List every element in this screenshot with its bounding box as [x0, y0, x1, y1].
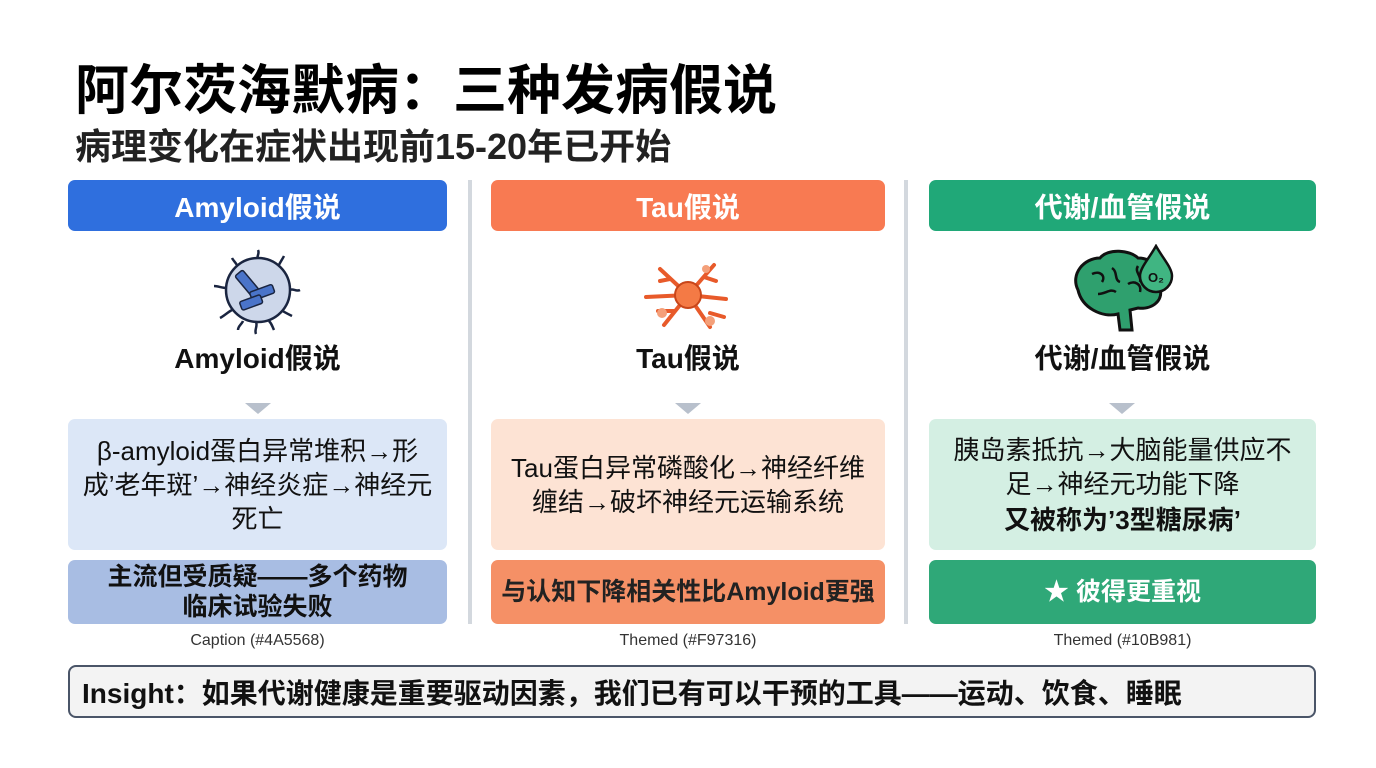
- icon: brain with O2: [1074, 244, 1174, 332]
- callout: metabolic: [929, 560, 1316, 624]
- arrow: tau: [675, 403, 701, 414]
- callout: amyloid: 主流但受质疑——多个药物临床试验失败: [107, 563, 408, 621]
- insight box: Insight：如果代谢健康是重要驱动因素，我们已有可以干预的工具——运动、饮食、睡眠: [82, 678, 1182, 708]
- text: tau mechanism: Tau蛋白异常磷酸化→神经纤维缠结→破坏神经元运输系统: [511, 452, 865, 516]
- arrow: amyloid: [245, 403, 271, 414]
- header: metabolic: 代谢/血管假说: [1035, 192, 1210, 222]
- header: tau: [491, 180, 885, 231]
- arrow: metabolic: [1109, 403, 1135, 414]
- icon: brain with O2: O₂: [1148, 270, 1164, 285]
- text: tau mechanism: [491, 419, 885, 550]
- header: tau: Tau假说: [636, 192, 740, 222]
- label: metabolic: 代谢/血管假说: [1035, 343, 1210, 374]
- text: metabolic mechanism: [929, 419, 1316, 550]
- header: metabolic: [929, 180, 1316, 231]
- callout: tau: [491, 560, 885, 624]
- text: amyloid mechanism: β-amyloid蛋白异常堆积→形成’老年斑’→神经炎症→神经元死亡: [83, 436, 432, 534]
- text: metabolic mechanism: 又被称为’3型糖尿病’: [1004, 504, 1241, 534]
- text: metabolic mechanism: 胰岛素抵抗→大脑能量供应不足→神经元功能下降: [953, 434, 1292, 498]
- label: tau: Tau假说: [636, 343, 740, 374]
- caption: amyloid: Caption (#4A5568): [190, 632, 325, 649]
- icon: neuron: [644, 262, 728, 330]
- insight box: [68, 665, 1316, 718]
- caption: metabolic: Themed (#10B981): [1054, 632, 1191, 649]
- header: amyloid: Amyloid假说: [174, 192, 341, 222]
- text: amyloid mechanism: [68, 419, 447, 550]
- callout: tau: 与认知下降相关性比Amyloid更强: [501, 578, 875, 606]
- callout: metabolic: ★ 彼得更重视: [1044, 578, 1201, 606]
- title: 阿尔茨海默病：三种发病假说: [75, 61, 777, 121]
- icon: amyloid plaque: [214, 250, 300, 334]
- label: amyloid: Amyloid假说: [174, 343, 341, 374]
- caption: tau: Themed (#F97316): [620, 632, 756, 649]
- header: amyloid: [68, 180, 447, 231]
- subtitle: 病理变化在症状出现前15-20年已开始: [75, 126, 671, 167]
